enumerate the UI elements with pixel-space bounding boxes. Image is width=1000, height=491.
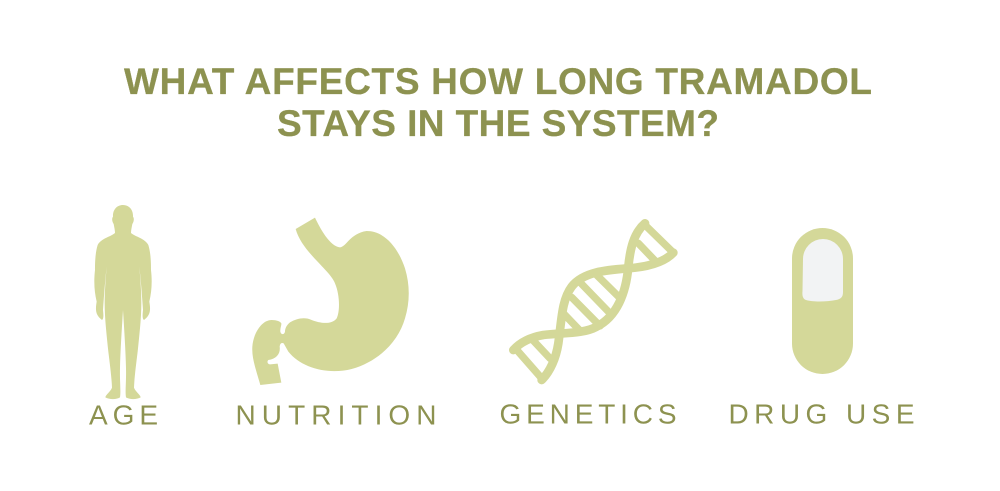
- label: genetics: GENETICS: [500, 398, 676, 430]
- icon: DNA helix: [513, 223, 673, 380]
- icon: capsule pill: [792, 228, 853, 374]
- title: [124, 61, 872, 144]
- icon: stomach: [252, 218, 409, 385]
- title: WHAT AFFECTS HOW LONG TRAMADOL: [124, 61, 872, 102]
- label: drug use: DRUG USE: [728, 398, 914, 430]
- label: age: AGE: [89, 400, 158, 430]
- icon: human body: [94, 205, 152, 399]
- label: nutrition: NUTRITION: [236, 400, 436, 430]
- title: STAYS IN THE SYSTEM?: [277, 103, 719, 144]
